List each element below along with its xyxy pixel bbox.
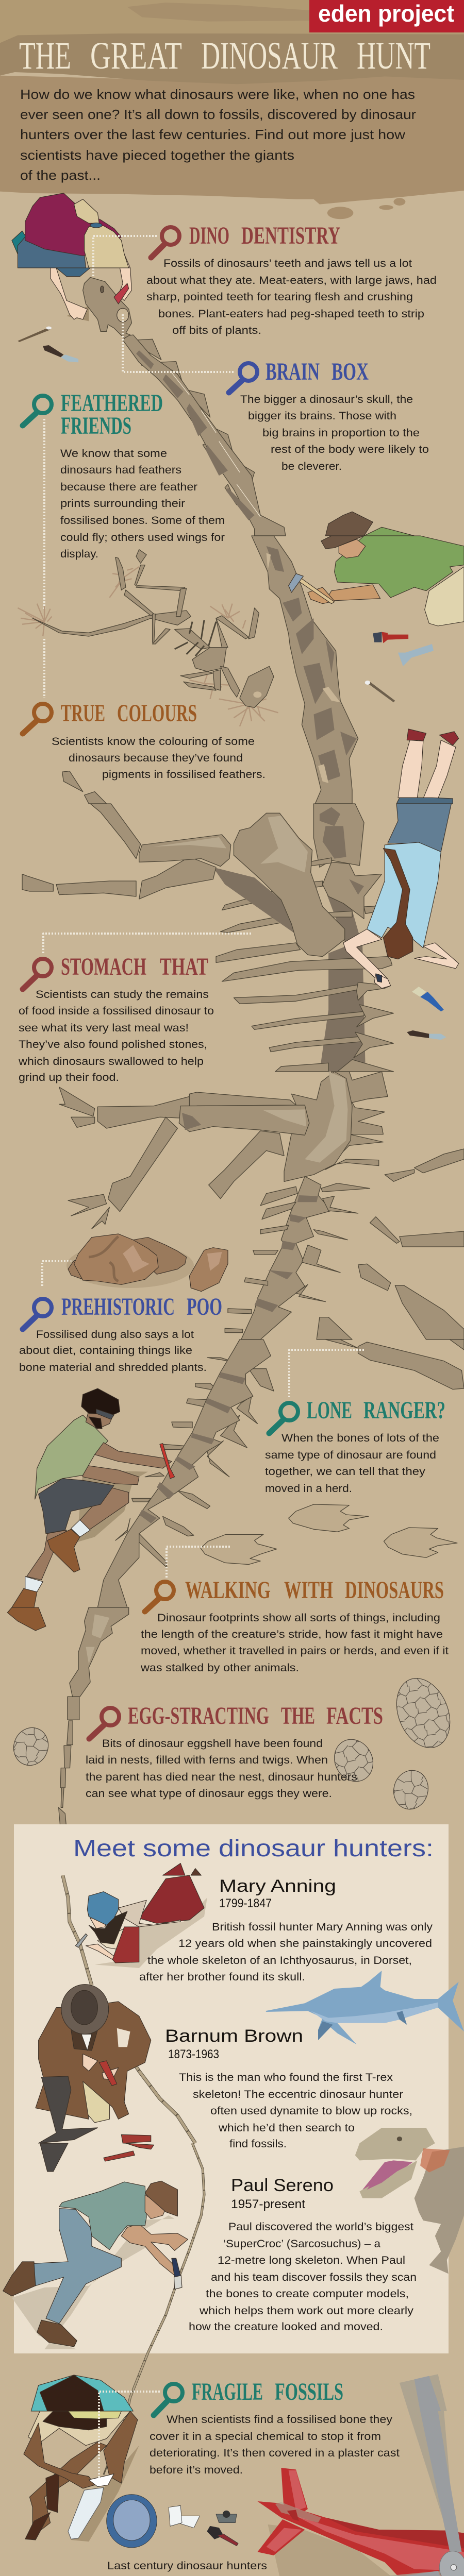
text: brain box: rest of the body were likely to [271, 443, 429, 455]
text: egg-stracting the facts: can see what type of dinosaur eggs they were. [86, 1787, 332, 1800]
text: stomach that: Scientists can study the remains [36, 988, 209, 1001]
heading: lone ranger [307, 1397, 445, 1424]
heading: egg-stracting the facts: EGG-STRACTING [128, 1702, 269, 1730]
text: stomach that: grind up their food. [19, 1071, 119, 1083]
text: true colours [52, 735, 266, 781]
dotted connectors [42, 236, 364, 1578]
person: bearded man with brush [7, 1388, 175, 1631]
helicopter [257, 2374, 464, 2576]
title [19, 35, 430, 77]
heading: brain box: BOX [332, 358, 369, 385]
text: stomach that: They’ve also found polished stones, [19, 1038, 207, 1050]
text: dino dentistry: Fossils of dinosaurs’ teeth and jaws tell us a lot [163, 257, 412, 269]
heading: walking with dinosaurs: WALKING [185, 1577, 271, 1604]
text: lone ranger: same type of dinosaur are found [265, 1449, 436, 1461]
text: Barnum Brown: which he’d then search to [218, 2122, 355, 2134]
text: stomach that [18, 988, 214, 1083]
text: Barnum Brown [165, 2026, 412, 2150]
text: Mary Anning [139, 1876, 433, 1983]
text: walking with dinosaurs: Dinosaur footprints show all sorts of things, including [157, 1612, 440, 1624]
dinosaur eggs [8, 1670, 460, 1813]
intro text: hunters over the last few centuries. Find out more just how [20, 127, 405, 142]
heading: stomach that: THAT [160, 953, 208, 980]
text: lone ranger [265, 1432, 439, 1495]
fossil dung [67, 1234, 228, 1292]
text: brain box: big brains in proportion to the [262, 427, 420, 439]
text: true colours: dinosaurs because they’ve found [69, 752, 243, 764]
text: true colours: Scientists know the colouring of some [52, 735, 255, 748]
person: Mary Anning [75, 1863, 207, 1968]
text: stomach that: see what its very last meal was! [19, 1022, 189, 1034]
text: walking with dinosaurs [140, 1612, 449, 1674]
text: fragile fossils: When scientists find a fossilised bone they [167, 2413, 392, 2426]
text: Paul Sereno: how the creature looked and moved. [189, 2320, 383, 2333]
text: Mary Anning: British fossil hunter Mary Anning was only [212, 1921, 433, 1933]
text: walking with dinosaurs: the length of the creature’s stride, how fast it might have [141, 1628, 443, 1640]
heading: dino dentistry: DINO [189, 222, 229, 249]
heading: dino dentistry: DENTISTRY [241, 222, 340, 249]
text: Barnum Brown: often used dynamite to blow up rocks, [210, 2105, 412, 2117]
tail segments [63, 1875, 204, 2475]
text: prehistoric poo: Fossilised dung also says a lot [36, 1328, 194, 1341]
bone: hand at true colours [62, 771, 107, 804]
text: egg-stracting the facts [86, 1737, 357, 1800]
text: Barnum Brown: This is the man who found the first T-rex [179, 2071, 393, 2083]
heading: true colours: COLOURS [117, 700, 197, 727]
title: THE [19, 35, 71, 77]
heading: lone ranger: LONE [307, 1397, 352, 1424]
heading: prehistoric poo: PREHISTORIC [61, 1293, 175, 1320]
intro text [20, 87, 416, 183]
heading: stomach that: STOMACH [61, 953, 146, 980]
person: woman lying with plait [343, 729, 459, 988]
heading: true colours [61, 700, 197, 727]
text: Mary Anning: the whole skeleton of an Ichthyosaurus, in Dorset, [147, 1954, 412, 1967]
text: brain box [240, 393, 429, 472]
text: brain box: The bigger a dinosaur’s skull, the [240, 393, 413, 405]
heading: feathered friends [61, 389, 163, 439]
text: Paul Sereno: the bones to create computer models, [206, 2287, 409, 2300]
text: egg-stracting the facts: the parent has died near the nest, dinosaur hunters [86, 1771, 357, 1783]
text: prehistoric poo: bone material and shredded plants. [19, 1361, 207, 1374]
heading: dino dentistry [189, 222, 340, 249]
text: Paul Sereno: 12-metre long skeleton. When Paul [218, 2254, 405, 2266]
text: walking with dinosaurs: was stalked by other animals. [140, 1662, 299, 1674]
title: HUNT [357, 35, 430, 77]
text: egg-stracting the facts: Bits of dinosaur eggshell have been found [102, 1737, 323, 1750]
text: feathered friends: could fly; others used wings for [60, 531, 225, 544]
text: Barnum Brown: find fossils. [229, 2138, 287, 2150]
text: prehistoric poo: about diet, containing things like [19, 1344, 192, 1357]
text: Mary Anning: 1799-1847 [219, 1896, 272, 1910]
heading: walking with dinosaurs: WITH [284, 1577, 333, 1604]
person: man in green shirt with hammer [289, 512, 464, 626]
text: last century: Last century dinosaur hunters [107, 2560, 267, 2572]
text: feathered friends: We know that some [60, 447, 167, 460]
text: Paul Sereno: and his team discover fossils they scan [211, 2271, 417, 2283]
text: Mary Anning: Mary Anning [219, 1876, 336, 1896]
text: Barnum Brown: 1873-1963 [168, 2047, 219, 2061]
text: prehistoric poo [19, 1328, 207, 1374]
text: walking with dinosaurs: moved, whether it travelled in pairs or herds, and even if it [141, 1645, 449, 1657]
heading: meet some dinosaur hunters: Meet some dinosaur hunters: [73, 1835, 434, 1861]
text: dino dentistry: sharp, pointed teeth for tearing flesh and crushing [146, 291, 413, 303]
heading: egg-stracting the facts: FACTS [326, 1702, 383, 1730]
heading: true colours: TRUE [61, 700, 105, 727]
text: true colours: pigments in fossilised feathers. [102, 768, 266, 781]
heading: brain box: BRAIN [266, 358, 320, 385]
illustration: ichthyosaurus [266, 1971, 464, 2044]
text: Paul Sereno: ‘SuperCroc’ (Sarcosuchus) – a [223, 2238, 380, 2250]
text: egg-stracting the facts: laid in nests, filled with ferns and twigs. When [86, 1754, 328, 1766]
person: Paul Sereno [3, 2181, 188, 2349]
text: dino dentistry: off bits of plants. [172, 324, 261, 336]
text: feathered friends: display. [60, 548, 98, 560]
tools: red brush, scraper, pick, blue brush, knife [365, 632, 446, 1040]
text: fragile fossils: deteriorating. It’s then covered in a plaster cast [150, 2447, 400, 2459]
text: Barnum Brown: skeleton! The eccentric dinosaur hunter [193, 2088, 403, 2100]
text: lone ranger: When the bones of lots of the [281, 1432, 439, 1444]
text: Barnum Brown: Barnum Brown [165, 2026, 303, 2046]
heading: feathered friends: FEATHERED [61, 389, 163, 417]
text: Paul Sereno: Paul discovered the world’s biggest [228, 2221, 413, 2233]
panel: meet some dinosaur hunters [14, 1824, 449, 2353]
plaster tools: bowl, bandage, pot, brush [107, 2495, 238, 2548]
text: lone ranger: together, we can tell that they [265, 1465, 425, 1478]
text: Paul Sereno [189, 2176, 417, 2333]
text: Mary Anning: 12 years old when she painstakingly uncovered [178, 1937, 432, 1950]
text: stomach that: of food inside a fossilised dinosaur to [19, 1005, 214, 1017]
text: brain box: bigger its brains. Those with [248, 410, 396, 422]
intro text: How do we know what dinosaurs were like, when no one has [20, 87, 415, 102]
top earth layers [0, 0, 464, 219]
heading: feathered friends: FRIENDS [61, 412, 131, 439]
dinosaur skeleton: neck and back [22, 335, 464, 1875]
text: stomach that: which dinosaurs swallowed to help [18, 1055, 204, 1067]
heading: prehistoric poo: POO [187, 1293, 222, 1320]
logo: eden project: eden project [318, 0, 454, 27]
text: fragile fossils: cover it in a special chemical to stop it from [150, 2430, 381, 2443]
text: Paul Sereno: Paul Sereno [231, 2176, 334, 2195]
text: Mary Anning: after her brother found its skull. [139, 1971, 305, 1983]
text: fragile fossils: before it’s moved. [150, 2464, 243, 2476]
text: dino dentistry: bones. Plant-eaters had peg-shaped teeth to strip [158, 308, 424, 320]
text: feathered friends: because there are feather [60, 481, 197, 493]
title: DINOSAUR [201, 35, 338, 77]
feathered fossil dinosaur [18, 550, 278, 726]
person: woman with blonde hair, brushing skull [12, 193, 131, 338]
text: dino dentistry [146, 257, 437, 336]
text: feathered friends [60, 447, 225, 560]
text: feathered friends: fossilised bones. Some of them [60, 514, 225, 527]
text: feathered friends: dinosaurs had feathers [60, 464, 181, 476]
text: brain box: be cleverer. [281, 460, 342, 472]
person: Barnum Brown [36, 1985, 154, 2172]
title: GREAT [90, 35, 182, 77]
heading: walking with dinosaurs [185, 1577, 444, 1604]
text: feathered friends: prints surrounding their [60, 497, 185, 510]
heading: fragile fossils: FOSSILS [275, 2378, 343, 2405]
dotted connector: fragile fossils [99, 2392, 160, 2478]
illustration: T-rex [355, 2128, 464, 2274]
text: Paul Sereno: which helps them work out more clearly [199, 2304, 413, 2317]
text: dino dentistry: about what they ate. Meat-eaters, with large jaws, had [146, 274, 437, 286]
intro text: of the past... [20, 167, 101, 183]
heading: egg-stracting the facts: THE [281, 1702, 315, 1730]
magnifying glass icons [23, 227, 298, 2415]
heading: fragile fossils: FRAGILE [192, 2378, 263, 2405]
text: lone ranger: moved in a herd. [265, 1482, 352, 1495]
person: woman with plaster cast [24, 2375, 139, 2541]
tools: brush stick and palette knife [18, 327, 78, 362]
intro text: ever seen one? It’s all down to fossils, discovered by dinosaur [20, 107, 416, 122]
intro text: scientists have pieced together the giants [20, 147, 294, 163]
text: fragile fossils [150, 2413, 400, 2476]
text: Paul Sereno: 1957-present [231, 2197, 305, 2211]
